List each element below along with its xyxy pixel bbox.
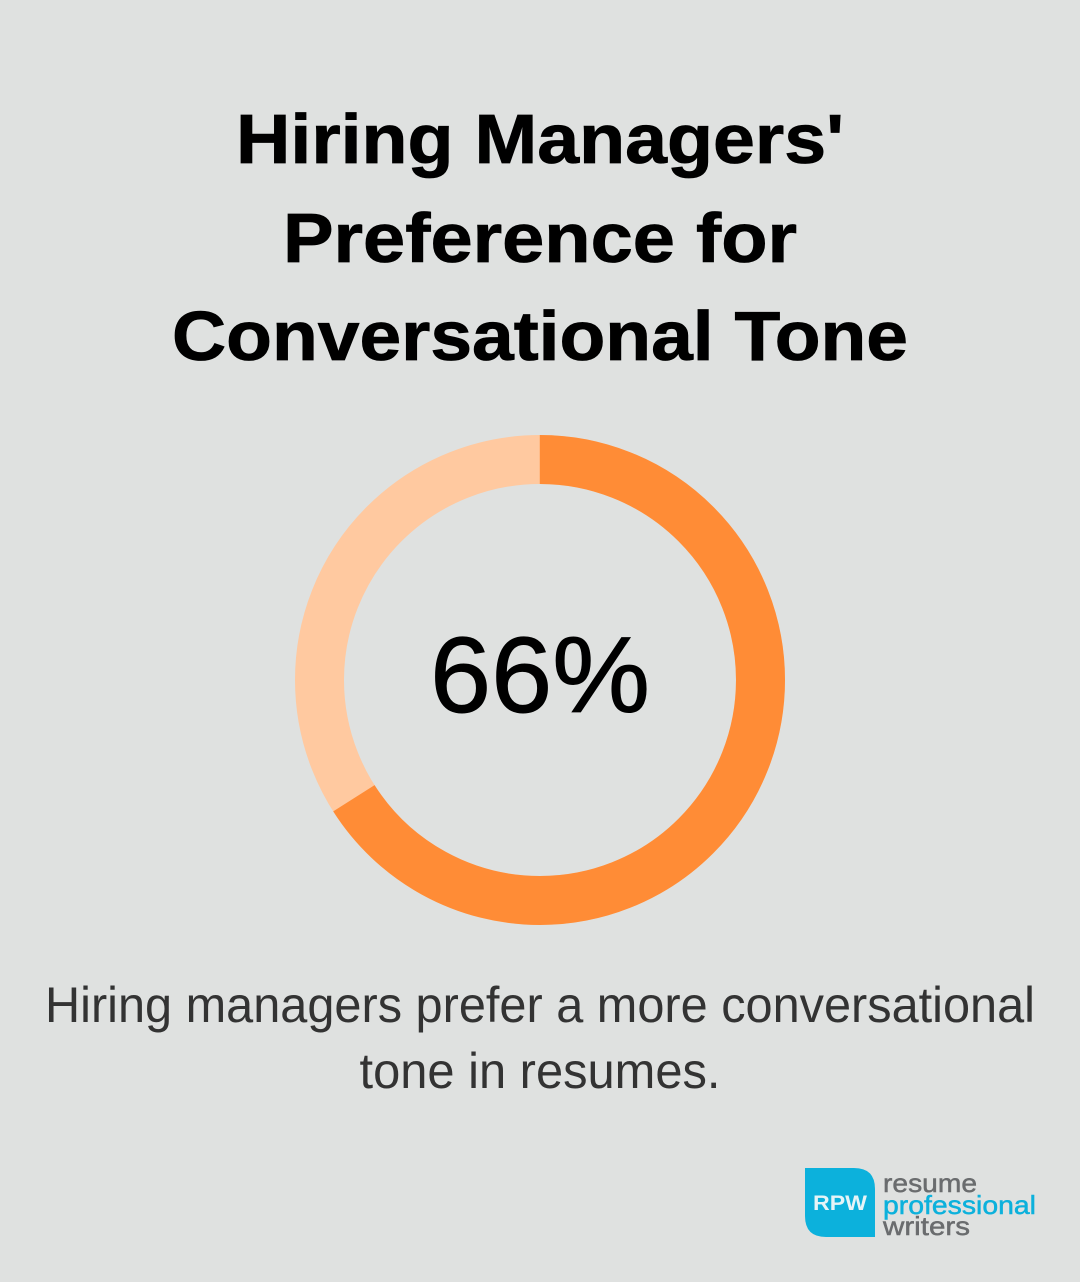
logo initials: RPW	[813, 1192, 867, 1215]
logo: resume professional writers	[805, 1168, 1036, 1241]
description text: tone in resumes.	[360, 1043, 720, 1099]
donut track	[320, 460, 760, 900]
title	[172, 100, 908, 375]
title: Conversational Tone	[172, 297, 908, 375]
donut value arc	[320, 460, 760, 900]
description text	[45, 977, 1035, 1099]
title: Preference for	[283, 199, 797, 277]
logo wordmark: writers	[882, 1211, 970, 1241]
title: Hiring Managers'	[236, 100, 844, 178]
logo badge	[805, 1168, 875, 1237]
description text: Hiring managers prefer a more conversational	[45, 977, 1035, 1033]
donut value label: 66%	[430, 614, 650, 735]
logo wordmark: resume	[883, 1168, 977, 1198]
logo wordmark	[882, 1168, 1036, 1241]
donut chart: 66%	[320, 460, 760, 900]
logo wordmark: professional	[883, 1190, 1036, 1220]
